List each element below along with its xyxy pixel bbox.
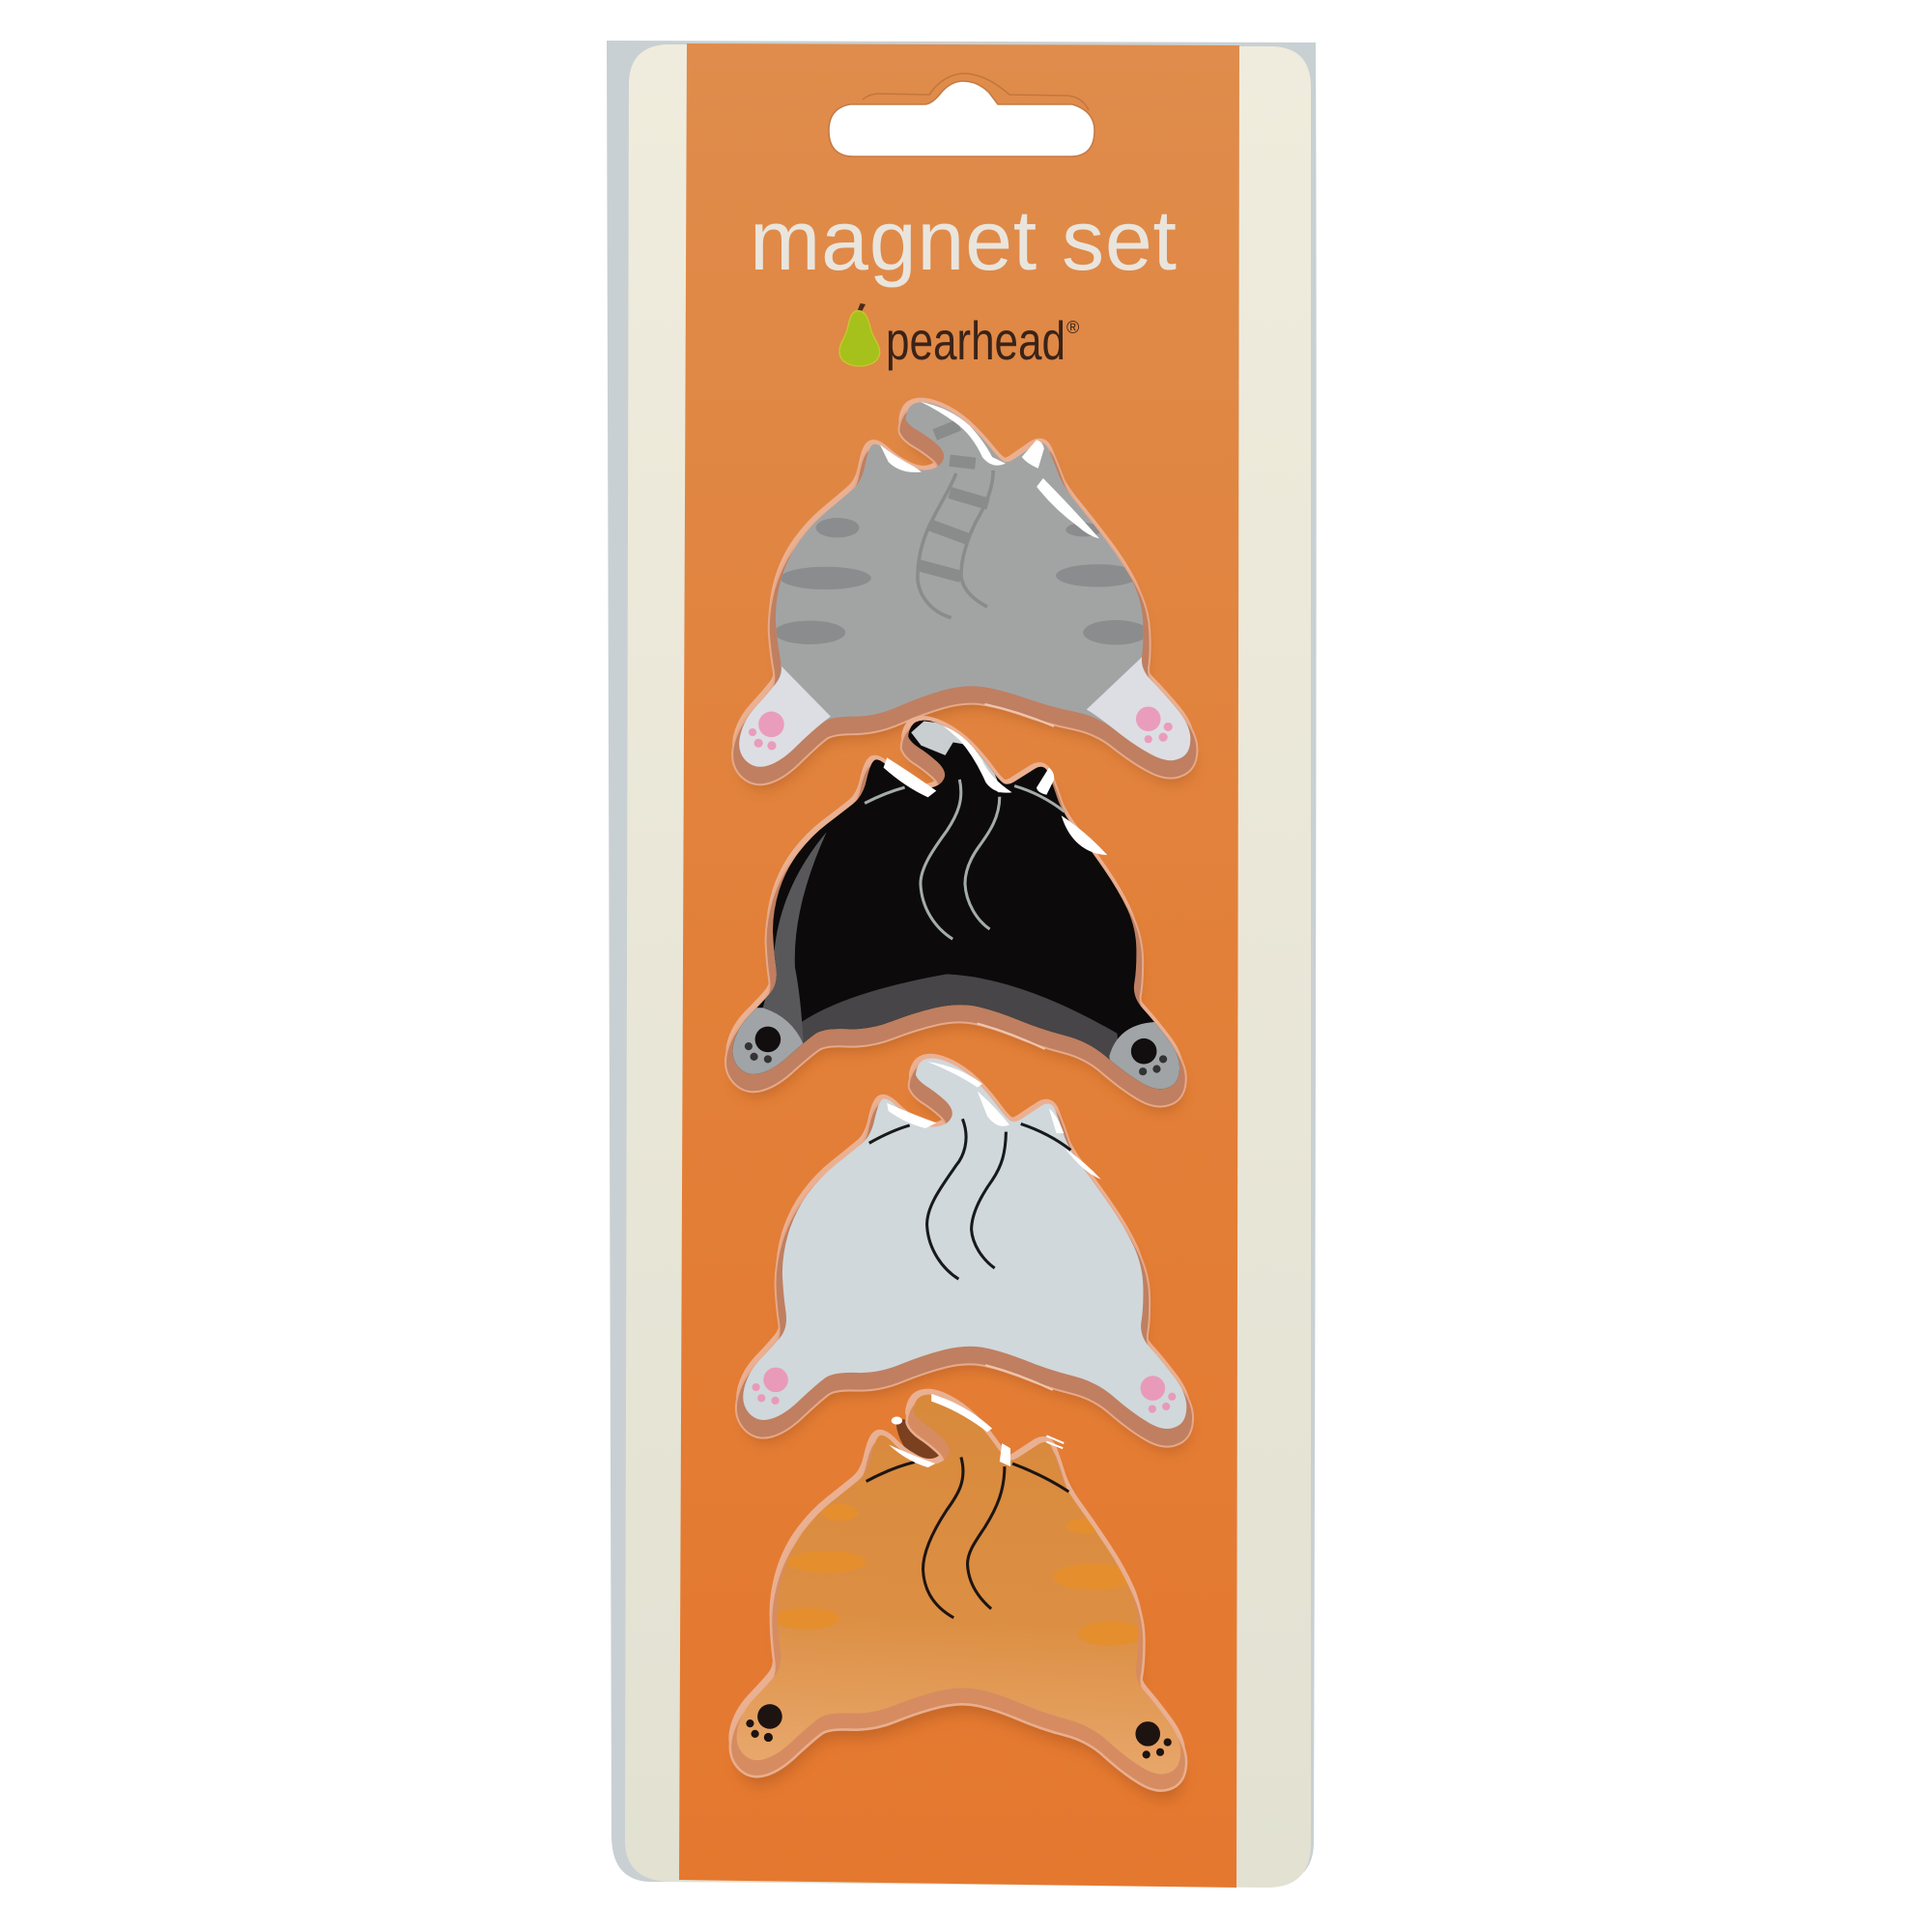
black cat glossy highlights [884, 725, 1107, 855]
tail gap [895, 1419, 962, 1463]
orange tabby stripes [775, 1504, 1144, 1646]
orange cat tail and ear lines [867, 1457, 1068, 1618]
black cat tail tip sheen [911, 722, 1011, 792]
gray pink paw pads [749, 706, 1173, 750]
gray glossy highlights [880, 402, 1099, 539]
hanger hole [829, 73, 1094, 156]
magnet: orange tabby cat [734, 1385, 1196, 1806]
black cat gray belly band [794, 974, 1120, 1068]
orange cat glossy highlights [889, 1394, 1010, 1467]
black cat tail lines [865, 780, 1065, 939]
brand logo: pearhead [839, 303, 1079, 371]
white cat tail and ear lines [869, 1119, 1070, 1279]
magnet: gray tabby cat [738, 402, 1193, 788]
black cat gray rim [763, 832, 827, 1044]
black cat markings [732, 721, 1179, 1090]
black cat paw pads [745, 1027, 1167, 1075]
gray tail stripes and lines [918, 425, 993, 617]
white cat pink paw pads [753, 1368, 1176, 1413]
clear plastic backing [607, 41, 1317, 1884]
registered mark: ® [1066, 318, 1079, 337]
brand name: pearhead [886, 310, 1065, 371]
title: magnet set: magnet set [750, 192, 1177, 288]
black cat gray paws [732, 1008, 1179, 1090]
magnet: white cat [741, 1051, 1198, 1458]
cream card [625, 44, 1311, 1888]
orange cat ear gloss ridges [1046, 1435, 1064, 1448]
orange cat highlight dot [892, 1416, 902, 1425]
magnet: black cat [724, 716, 1187, 1115]
gray tabby stripes [775, 518, 1149, 645]
white cat glossy highlights [887, 1062, 1101, 1179]
orange centre panel [679, 43, 1239, 1888]
orange cat paw pads [746, 1704, 1172, 1758]
icon: pear [839, 303, 880, 366]
